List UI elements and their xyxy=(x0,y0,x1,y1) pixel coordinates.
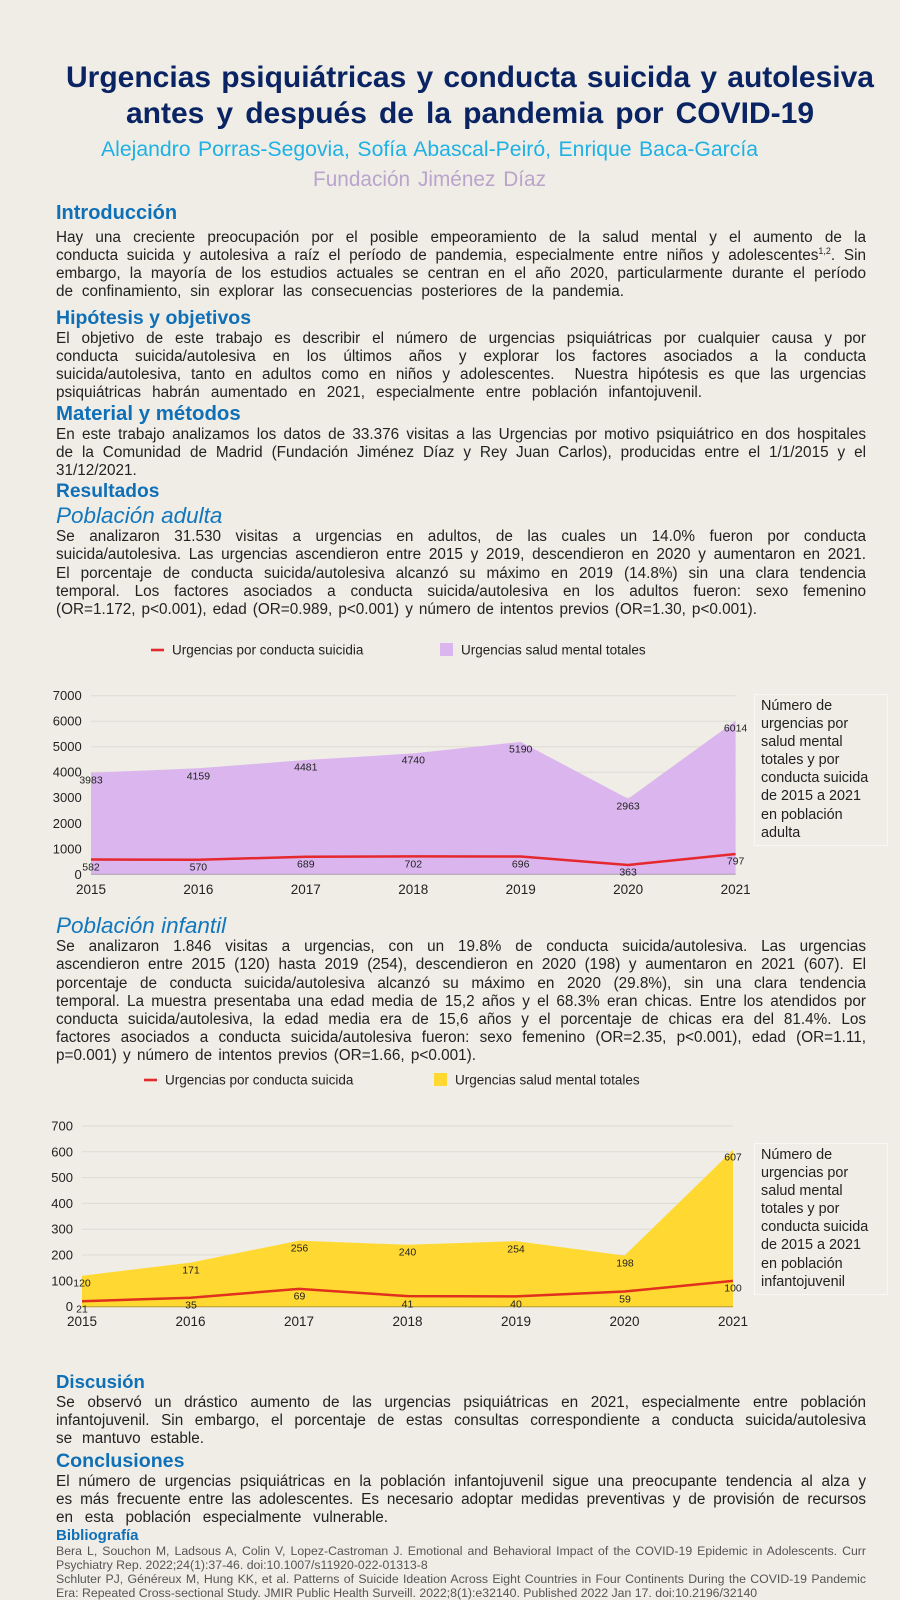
y axis labels: 7000 xyxy=(53,688,82,703)
references: Bera L, Souchon M, Ladsous A, Colin V, Lopez-Castroman J. Emotional and Behavioral Impact of the COVID-19 Epidemic in Adolescents. Curr xyxy=(56,1544,866,1558)
data labels: totales: 120 xyxy=(73,1278,91,1290)
caption: gráfico infantil: urgencias por xyxy=(761,1165,848,1181)
chart: población infantil xyxy=(51,1072,748,1329)
text: población infantil xyxy=(56,938,866,1064)
caption: gráfico infantil: infantojuvenil xyxy=(761,1274,845,1290)
caption: gráfico infantil xyxy=(754,1143,888,1295)
text: hipótesis xyxy=(56,330,866,401)
data labels: conducta suicida: 582 xyxy=(82,861,100,873)
data labels: conducta suicida: 21 xyxy=(76,1303,88,1315)
heading: Introducción: Introducción xyxy=(56,202,177,224)
y axis labels: 6000 xyxy=(53,714,82,729)
references xyxy=(56,1544,866,1600)
heading: Resultados: Resultados xyxy=(56,481,159,502)
data labels: totales: 5190 xyxy=(509,743,533,755)
area: urgencias salud mental totales xyxy=(82,1150,733,1307)
references: Psychiatry Rep. 2022;24(1):37-46. doi:10.1007/s11920-022-01313-8 xyxy=(56,1558,428,1572)
data labels: conducta suicida: 100 xyxy=(724,1283,742,1295)
text: población adulta: suicida/autolesiva. Las urgencias ascendieron entre 2015 y 2019, descendieron en 2020 y aumentaron en 2021. xyxy=(56,546,866,563)
x axis labels: 2021 xyxy=(721,882,751,897)
caption: gráfico infantil: de 2015 a 2021 xyxy=(761,1237,861,1253)
legend: infantil xyxy=(144,1072,640,1088)
data labels: conducta suicida: 702 xyxy=(405,858,422,870)
heading: Discusión: Discusión xyxy=(56,1371,145,1392)
heading: Conclusiones: Conclusiones xyxy=(56,1450,184,1472)
affiliation: Fundación Jiménez Díaz xyxy=(313,168,546,191)
y axis labels: 400 xyxy=(51,1196,73,1211)
subheading: Población infantil: Población infantil xyxy=(56,913,226,938)
text: discusión: infantojuvenil. Sin embargo, el porcentaje de estas consultas correspondiente a conducta suicida/autolesiva xyxy=(56,1412,866,1429)
caption: gráfico infantil: conducta suicida xyxy=(761,1219,868,1235)
y axis labels: 1000 xyxy=(53,841,82,856)
y axis labels: 100 xyxy=(51,1273,73,1288)
data labels: totales: 254 xyxy=(507,1243,525,1255)
heading: Hipótesis y objetivos: Hipótesis y objetivos xyxy=(56,307,251,329)
caption: gráfico adultos: de 2015 a 2021 xyxy=(761,788,861,804)
x axis labels: 2019 xyxy=(506,882,536,897)
y axis labels: 2000 xyxy=(53,816,82,831)
caption: gráfico infantil: totales y por xyxy=(761,1201,839,1217)
text: conclusiones: es más frecuente entre las adolescentes. Es necesario adoptar medidas preventivas y de provisión de recursos xyxy=(56,1490,866,1508)
data labels: totales: 240 xyxy=(399,1247,416,1259)
caption: gráfico adultos: conducta suicida xyxy=(761,770,868,786)
y axis labels: 3000 xyxy=(53,790,82,805)
caption: gráfico adultos: totales y por xyxy=(761,752,839,768)
caption: gráfico adultos: adulta xyxy=(761,825,800,841)
text: introducción: Hay una creciente preocupación por el posible empeoramiento de la salud mental y el aumento de la xyxy=(56,229,866,246)
heading: Material y métodos: Material y métodos xyxy=(56,403,241,425)
y axis labels: 600 xyxy=(51,1144,73,1159)
legend: infantil: Urgencias por conducta suicida xyxy=(165,1072,354,1088)
data labels: totales: 3983 xyxy=(79,775,103,787)
y axis labels: 0 xyxy=(66,1299,73,1314)
text: hipótesis: suicida/autolesiva, tanto en adultos como en niños y adolescentes. Nuestra hipótesis es que las urgencias xyxy=(56,366,866,383)
text: discusión: Se observó un drástico aumento de las urgencias psiquiátricas en 2021, especialmente entre población xyxy=(56,1394,866,1411)
text: hipótesis: El objetivo de este trabajo es describir el número de urgencias psiquiátricas por cualquier causa y por xyxy=(56,330,866,347)
x axis labels: 2020 xyxy=(609,1314,640,1329)
x axis labels: 2015 xyxy=(76,882,106,897)
text: introducción xyxy=(56,229,866,300)
text: conclusiones xyxy=(56,1472,866,1526)
text: material y métodos: En este trabajo analizamos los datos de 33.376 visitas a las Urgencias por motivo psiquiátrico en dos hospitales xyxy=(56,426,866,443)
x axis labels: 2017 xyxy=(291,882,321,897)
data labels: conducta suicida: 570 xyxy=(190,862,207,874)
data labels: totales xyxy=(73,1152,742,1290)
x axis labels xyxy=(76,882,751,897)
title: antes y después de la pandemia por COVID-19 xyxy=(126,97,814,130)
legend: adulta xyxy=(151,642,646,658)
y axis labels: 4000 xyxy=(53,765,82,780)
caption: gráfico infantil: Número de xyxy=(761,1147,832,1163)
x axis labels: 2017 xyxy=(284,1314,314,1329)
data labels: totales xyxy=(79,722,747,813)
caption: gráfico adultos: salud mental xyxy=(761,734,843,750)
text: material y métodos: 31/12/2021. xyxy=(56,462,137,479)
legend: infantil: Urgencias salud mental totales xyxy=(455,1072,640,1088)
text: población infantil: temporal. La muestra presentaba una edad media de 15,2 años y el 68.3% eran chicas. Entre los atendidos por xyxy=(56,993,866,1010)
references: Era: Repeated Cross-sectional Study. JMIR Public Health Surveill. 2022;8(1):e32140. Published 2022 Jan 17. doi:10.2196/32140 xyxy=(56,1586,757,1600)
y axis labels xyxy=(51,1118,73,1314)
x axis labels: 2018 xyxy=(398,882,428,897)
title: Urgencias psiquiátricas y conducta suicida y autolesiva xyxy=(66,61,874,94)
text: discusión: se mantuvo estable. xyxy=(56,1430,204,1447)
text: conclusiones: en esta población especialmente vulnerable. xyxy=(56,1508,388,1526)
data labels: conducta suicida: 35 xyxy=(185,1300,197,1312)
caption: gráfico adultos xyxy=(754,694,888,846)
text: introducción: embargo, la mayoría de los estudios actuales se centran en el año 2020, particularmente durante el período xyxy=(56,265,866,282)
text: población adulta: temporal. Los factores asociados a conducta suicida/autolesiva en los adultos fueron: sexo femenino xyxy=(56,583,866,600)
text: población adulta: El porcentaje de conducta suicida/autolesiva alcanzó su máximo en 2019 (14.8%) sin una clara tendencia xyxy=(56,565,866,582)
text: conclusiones: El número de urgencias psiquiátricas en la población infantojuvenil sigue una preocupante tendencia al alza y xyxy=(56,1472,866,1490)
data labels: totales: 607 xyxy=(724,1152,742,1164)
text: población adulta xyxy=(56,528,866,618)
data labels: conducta suicida: 696 xyxy=(512,858,530,870)
text: población infantil: p=0.001) y número de intentos previos (OR=1.66, p<0.001). xyxy=(56,1047,476,1064)
x axis labels xyxy=(67,1314,748,1329)
x axis labels: 2018 xyxy=(392,1314,423,1329)
text: población infantil: ascendieron entre 2015 (120) hasta 2019 (254), descendieron en 2020 (198) y aumentaron en 2021 (607). El xyxy=(56,956,866,973)
caption: gráfico infantil: salud mental xyxy=(761,1183,843,1199)
text: población infantil: conducta suicida/autolesiva, la edad media era de 15,6 años y el porcentaje de chicas era del 81.4%. Los xyxy=(56,1011,866,1028)
data labels: conducta suicida: 797 xyxy=(727,856,745,868)
data labels: conducta suicida: 40 xyxy=(510,1298,522,1310)
text: material y métodos: de la Comunidad de Madrid (Fundación Jiménez Díaz y Rey Juan Carlos), producidas entre el 1/1/2015 y el xyxy=(56,444,866,461)
y axis labels: 5000 xyxy=(53,739,82,754)
data labels: totales: 198 xyxy=(616,1258,634,1270)
data labels: conducta suicida: 69 xyxy=(294,1291,305,1303)
x axis labels: 2015 xyxy=(67,1314,97,1329)
text: discusión xyxy=(56,1394,866,1447)
data labels: totales: 4740 xyxy=(402,755,425,767)
y axis labels: 200 xyxy=(51,1248,73,1262)
caption: gráfico adultos: Número de xyxy=(761,698,832,714)
text: población infantil: porcentaje de conducta suicida/autolesiva alcanzó su máximo en 2020 (29.8%), sin una clara tendencia xyxy=(56,975,866,992)
authors: Alejandro Porras-Segovia, Sofía Abascal-Peiró, Enrique Baca-García xyxy=(101,138,758,161)
legend: adulta: Urgencias por conducta suicidia xyxy=(172,642,364,658)
text: hipótesis: psiquiátricas habrán aumentado en 2021, especialmente entre población infantojuvenil. xyxy=(56,384,702,401)
text: introducción: conducta suicida y autolesiva a raíz el período de pandemia, especialmente entre niños y adolescentes1,2. Sin xyxy=(56,246,866,264)
data labels: totales: 4159 xyxy=(187,770,210,782)
text: población infantil: Se analizaron 1.846 visitas a urgencias, con un 19.8% de conducta suicida/autolesiva. Las urgencias xyxy=(56,938,866,955)
data labels: totales: 6014 xyxy=(724,722,747,734)
references: Schluter PJ, Généreux M, Hung KK, et al. Patterns of Suicide Ideation Across Eight Countries in Four Continents During the COVID-19 Pandemic xyxy=(56,1572,866,1586)
y axis labels: 0 xyxy=(74,867,82,882)
data labels: conducta suicida: 59 xyxy=(619,1294,631,1306)
line: urgencias por conducta suicida xyxy=(91,854,736,865)
data labels: conducta suicida xyxy=(82,856,745,879)
chart: población adulta xyxy=(53,642,751,897)
text: introducción: de confinamiento, sin explorar las consecuencias posteriores de la pandemia. xyxy=(56,283,624,300)
x axis labels: 2019 xyxy=(501,1314,531,1329)
x axis labels: 2021 xyxy=(718,1314,748,1329)
text: población infantil: factores asociados a conducta suicida/autolesiva fueron: sexo femenino (OR=2.35, p<0.001), edad (OR=1.11, xyxy=(56,1029,866,1046)
x axis labels: 2020 xyxy=(613,882,643,897)
data labels: totales: 4481 xyxy=(294,762,318,774)
subheading: Población adulta: Población adulta xyxy=(56,502,222,528)
y axis labels: 300 xyxy=(51,1222,73,1237)
data labels: conducta suicida: 41 xyxy=(402,1298,413,1310)
data labels: totales: 2963 xyxy=(616,801,640,813)
x axis labels: 2016 xyxy=(183,882,213,897)
data labels: conducta suicida xyxy=(76,1283,742,1315)
caption: gráfico adultos: en población xyxy=(761,807,843,823)
area: urgencias salud mental totales xyxy=(91,721,736,874)
data labels: conducta suicida: 363 xyxy=(619,867,637,879)
text: población adulta: (OR=1.172, p<0.001), edad (OR=0.989, p<0.001) y número de intentos previos (OR=1.30, p<0.001). xyxy=(56,601,757,618)
data labels: totales: 256 xyxy=(291,1243,308,1255)
x axis labels: 2016 xyxy=(175,1314,206,1329)
legend: adulta: Urgencias salud mental totales xyxy=(461,642,646,658)
text: hipótesis: conducta suicida/autolesiva en los últimos años y explorar los factores asociados a la conducta xyxy=(56,348,866,365)
data labels: conducta suicida: 689 xyxy=(297,859,315,871)
heading: Bibliografía: Bibliografía xyxy=(56,1527,139,1544)
caption: gráfico infantil: en población xyxy=(761,1256,843,1272)
y axis labels xyxy=(53,688,82,882)
line: urgencias por conducta suicida xyxy=(82,1281,733,1301)
text: población adulta: Se analizaron 31.530 visitas a urgencias en adultos, de las cuales un 14.0% fueron por conducta xyxy=(56,528,866,545)
text: material y métodos xyxy=(56,426,866,479)
y axis labels: 700 xyxy=(51,1118,73,1134)
y axis labels: 500 xyxy=(51,1170,73,1185)
title xyxy=(66,61,874,130)
data labels: totales: 171 xyxy=(182,1265,200,1277)
caption: gráfico adultos: urgencias por xyxy=(761,716,848,732)
